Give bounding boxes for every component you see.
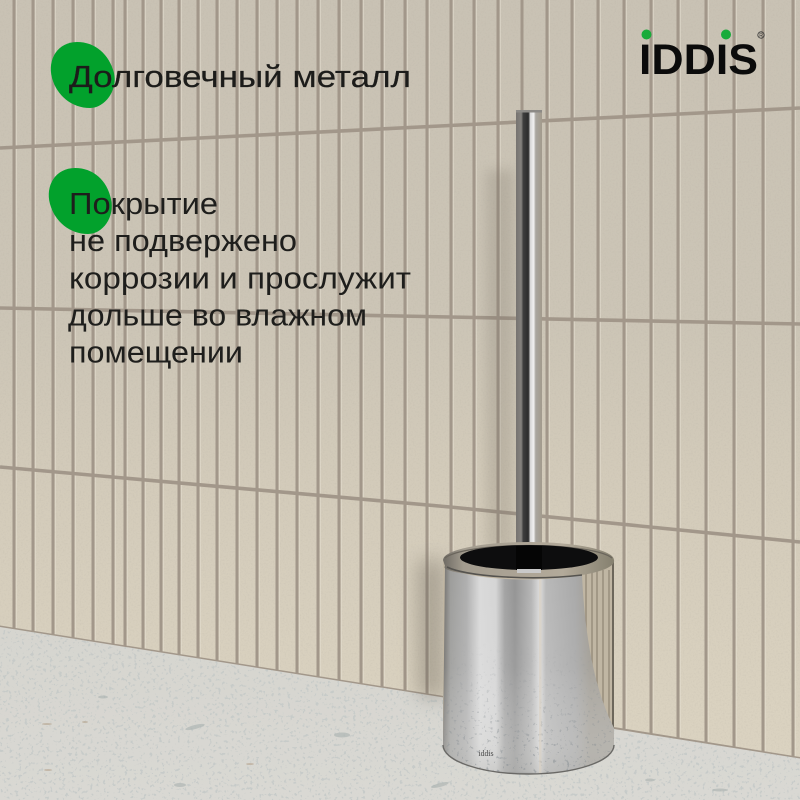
body text: coating description: не подвержено (69, 223, 297, 258)
heading: durable metal: Долговечный металл (69, 59, 411, 94)
body text: coating description: дольше во влажном (68, 298, 367, 332)
shadow of holder on wall (418, 560, 444, 700)
shadow of brush handle on wall (486, 170, 514, 550)
floor (0, 620, 800, 800)
holder rim (443, 542, 614, 577)
brush handle (516, 110, 542, 550)
green blob: second text (49, 168, 112, 234)
logo: IDDIS: R (759, 33, 763, 39)
toilet brush holder (440, 542, 620, 780)
holder bottom edge (443, 745, 614, 774)
holder opening (460, 545, 598, 570)
holder back reflection of the tiled wall (443, 561, 614, 735)
logo: IDDIS: IDDIS (639, 36, 758, 84)
body text: coating description: Покрытие (69, 186, 218, 221)
body text: coating description: помещении (69, 334, 243, 370)
small engraved logo: iddis (478, 749, 494, 758)
body text: coating description: коррозии и прослужит (69, 260, 411, 296)
body text: coating description (68, 186, 411, 370)
handle inside opening (516, 546, 542, 570)
holder metal front (443, 568, 614, 774)
green blob: first heading (51, 42, 115, 108)
